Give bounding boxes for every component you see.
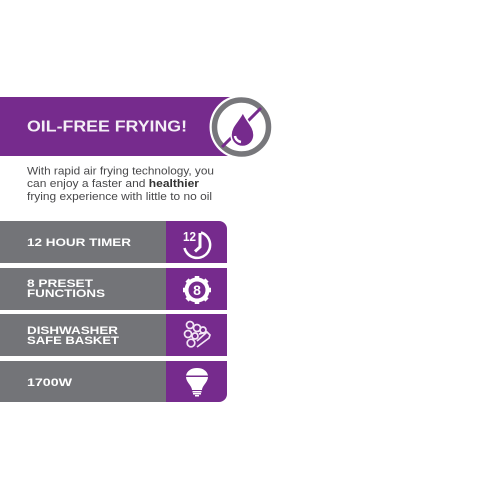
icon: gear [183,276,211,304]
icon: fries basket [184,322,210,347]
panel: 8 preset functions [0,268,227,310]
icon: no oil [210,95,274,159]
icon: gear: 8 [193,282,201,298]
label line 2: FUNCTIONS [27,288,105,300]
label: DISHWASHER [27,325,118,337]
label line 2: SAFE BASKET [27,335,119,347]
text block: description line 2: can enjoy a faster and healthier [27,178,200,190]
text block: description: With rapid air frying technology, you [27,166,214,178]
panel: 1700W [0,361,227,402]
icon: timer: 12 [183,229,196,244]
panel: 12 hour timer [0,221,227,263]
label: 8 PRESET [27,278,93,290]
panel: oil-free banner [0,95,274,159]
icon: timer [183,229,210,258]
panel: dishwasher safe basket [0,314,227,356]
icon: light bulb [186,368,208,396]
text block: description line 3: frying experience with little to no oil [27,191,212,203]
title: OIL-FREE FRYING! [27,118,187,136]
label: 12 HOUR TIMER [27,237,131,249]
label: 1700W [27,377,73,389]
